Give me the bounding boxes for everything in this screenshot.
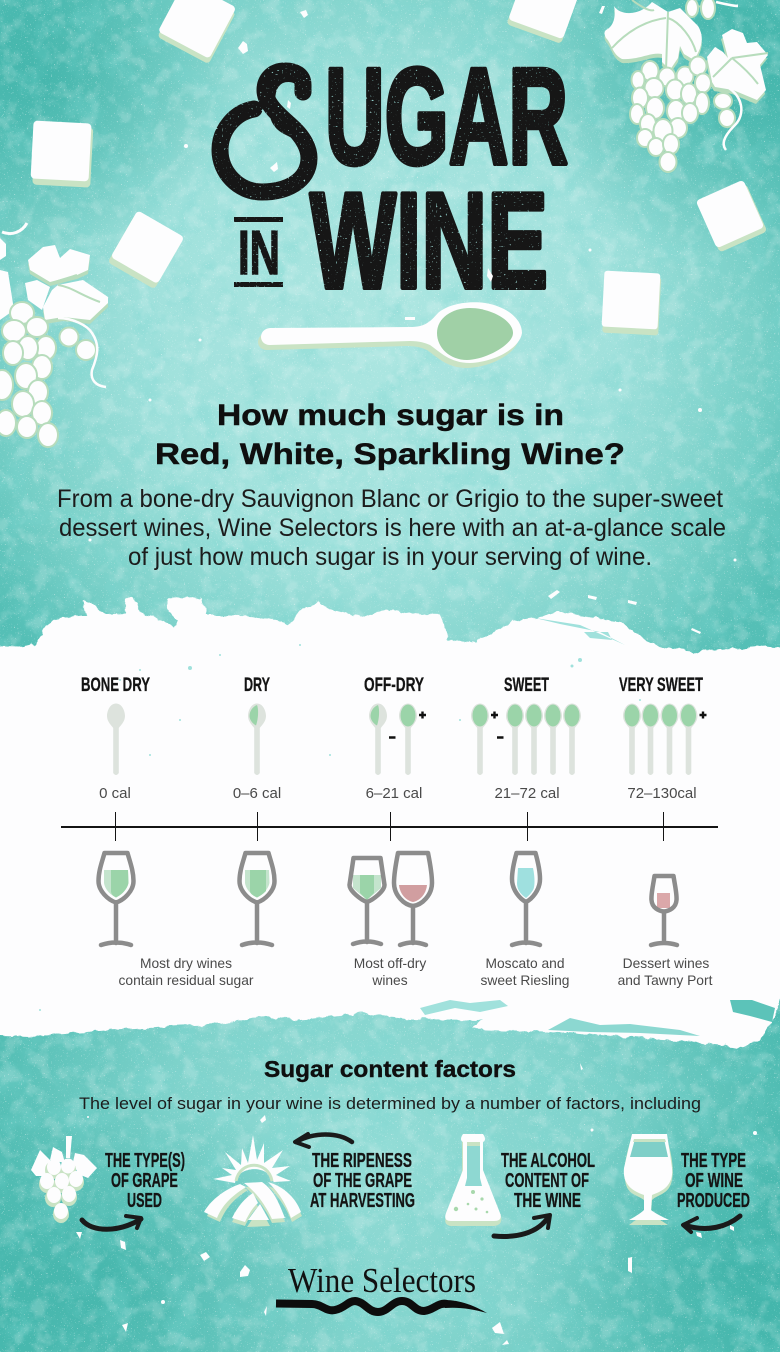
arrow: grape: [82, 1216, 141, 1229]
glass captions: sweet Riesling: [481, 973, 569, 988]
grapes: left: [0, 223, 108, 447]
glass: dry: [240, 853, 274, 945]
factor: type of grape: OF GRAPE: [111, 1169, 178, 1192]
sugar cube: centre left: [108, 210, 184, 289]
spoon: [258, 302, 522, 368]
scale axis: [61, 812, 718, 841]
glass captions: contain residual sugar: [118, 973, 254, 988]
factor: type of grape: [105, 1149, 185, 1212]
sugar cube: top left: [156, 0, 238, 64]
factors intro: The level of sugar in your wine is determined by a number of factors, including: [79, 1095, 701, 1113]
factor: alcohol: THE ALCOHOL: [501, 1149, 595, 1172]
factor: ripeness: THE RIPENESS: [312, 1149, 412, 1172]
arrow: ripeness: [295, 1134, 352, 1147]
icon: grapes: [31, 1136, 97, 1223]
factor: ripeness: OF THE GRAPE: [313, 1169, 412, 1192]
glass captions: Most off-dry: [354, 956, 426, 971]
spoons: dry: [248, 704, 266, 775]
icon: wine glass: [624, 1134, 673, 1225]
glass: bone dry: [98, 853, 134, 945]
factor: type of grape: THE TYPE(S): [105, 1149, 185, 1172]
spoons: sweet: [471, 704, 581, 775]
glass captions: Moscato and: [486, 956, 564, 971]
spoons: very sweet: [623, 704, 706, 775]
sugar cube: right: [696, 179, 767, 253]
title: UGAR: UGAR: [325, 40, 568, 194]
title: S: [262, 35, 314, 227]
scale labels: [81, 674, 703, 696]
glass captions: Most dry wines: [140, 956, 232, 971]
intro text: dessert wines, Wine Selectors is here with an at-a-glance scale: [59, 515, 726, 542]
heading: Red, White, Sparkling Wine?: [155, 438, 625, 471]
scale labels: SWEET: [504, 674, 549, 696]
scale labels: VERY SWEET: [619, 674, 703, 696]
glass: sweet: [512, 853, 540, 945]
icon: sun over vineyard: [204, 1135, 302, 1227]
sugar cube: centre right: [601, 271, 661, 335]
scale labels: DRY: [244, 674, 270, 696]
intro text: of just how much sugar is in your serving of wine.: [128, 544, 652, 571]
calorie labels: 6–21 cal: [366, 785, 422, 802]
factor: type of wine: [677, 1149, 750, 1212]
scale labels: OFF-DRY: [364, 674, 424, 696]
heading: How much sugar is in: [217, 399, 564, 432]
grapes: top right: [604, 0, 768, 172]
arrow: wine type: [683, 1216, 740, 1232]
title: IN: [234, 217, 283, 288]
factor: type of wine: THE TYPE: [681, 1149, 746, 1172]
title: [212, 62, 568, 290]
intro text: From a bone-dry Sauvignon Blanc or Grigio to the super-sweet: [57, 486, 723, 513]
factor: type of grape: USED: [127, 1189, 162, 1212]
glass captions: wines: [371, 973, 408, 988]
title: letter S swirl: [220, 71, 309, 192]
glass captions: and Tawny Port: [618, 973, 713, 988]
intro text: [57, 486, 726, 571]
glass: off-dry red: [394, 853, 432, 945]
glass captions: [118, 956, 713, 988]
calorie labels: [99, 785, 697, 802]
title: IN: IN: [238, 219, 280, 288]
factor: alcohol: CONTENT OF: [505, 1169, 589, 1192]
calorie labels: 21–72 cal: [494, 785, 560, 802]
factors heading: Sugar content factors: [264, 1056, 516, 1082]
factor: ripeness: [310, 1149, 415, 1212]
glass: off-dry white: [350, 858, 384, 944]
sugar cube: top right: [506, 0, 583, 44]
factor: alcohol: [501, 1149, 595, 1212]
factor: ripeness: AT HARVESTING: [310, 1189, 415, 1212]
glass: very sweet: [651, 876, 677, 945]
heading: [155, 399, 625, 471]
glass captions: Dessert wines: [623, 956, 709, 971]
scale labels: BONE DRY: [81, 674, 150, 696]
logo: Wine Selectors: [288, 1261, 476, 1300]
factor: alcohol: THE WINE: [514, 1189, 581, 1212]
arrow: alcohol: [494, 1215, 550, 1236]
spoons: off-dry: [369, 704, 426, 775]
calorie labels: 72–130cal: [627, 785, 697, 802]
factor: type of wine: OF WINE: [685, 1169, 743, 1192]
logo: [276, 1261, 487, 1313]
title: WINE: WINE: [310, 164, 548, 316]
white paint band: [0, 596, 780, 1048]
calorie labels: 0–6 cal: [233, 785, 281, 802]
sugar cube: left: [30, 121, 94, 188]
calorie labels: 0 cal: [99, 785, 131, 802]
spoons: bone dry: [107, 704, 125, 775]
icon: flask: [445, 1134, 501, 1226]
